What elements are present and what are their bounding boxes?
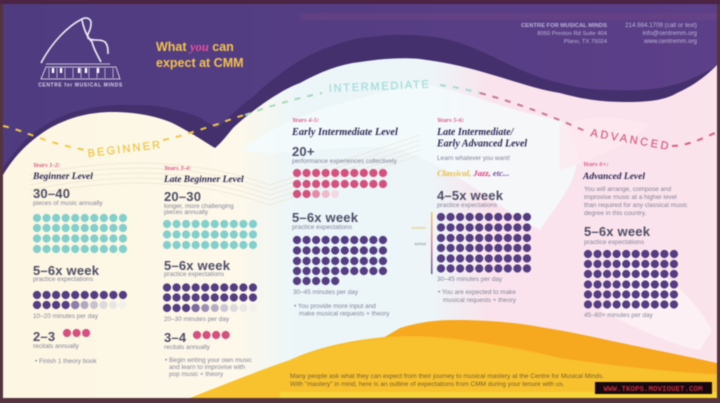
minutes caption: 20–30 minutes per day: [164, 316, 230, 323]
purple header background: [3, 4, 717, 184]
dot grid: practice: [588, 254, 675, 304]
stat: pieces: 30–40: [33, 186, 70, 201]
dots: recitals: [197, 331, 227, 339]
years: Years 4-5:: [292, 117, 319, 124]
title: What you can: [156, 40, 234, 54]
practice caption: practice expectations: [584, 239, 644, 246]
description: degree in this country.: [584, 210, 647, 217]
years: Years 6+:: [583, 161, 609, 168]
panel: late intermediate / early advanced level: [412, 117, 528, 304]
bullet: • Finish 1 theory book: [35, 358, 97, 365]
bullet: make musical requests + theory: [299, 310, 390, 318]
years: Years 3-4:: [164, 165, 191, 172]
level heading: Early Intermediate Level: [291, 127, 398, 138]
bottom border: [0, 398, 720, 403]
level heading: Late Intermediate/: [436, 127, 515, 138]
description: than required for any classical music: [584, 202, 688, 209]
years: Years 5-6:: [437, 117, 464, 124]
contact: address: [521, 23, 608, 45]
bullet: and learn to improvise with: [169, 364, 245, 371]
footer intro text: With "mastery" in mind, here is an outline of expectations from CMM during your tenure with us.: [290, 381, 565, 388]
level heading: Beginner Level: [32, 172, 93, 182]
stat: practice: 4–5x week: [437, 188, 504, 203]
dot grid: practice: [37, 295, 126, 309]
dot grid: pieces: [167, 224, 254, 245]
footer intro text: Many people ask what they can expect from their journey to musical mastery at the Centre for Musical Minds.: [290, 373, 604, 380]
dot grid: practice: [441, 217, 528, 268]
bullet: • You are expected to make: [438, 289, 516, 296]
stat: recitals: 2–3: [33, 329, 55, 344]
level heading: Advanced Level: [582, 172, 645, 182]
contact: phone, email, web: 214.984.1709 (call or text): [625, 22, 697, 29]
contact: phone, email, web: [625, 22, 698, 45]
bullet: • You provide more input and: [294, 303, 376, 310]
side bracket: summer and school: school: [414, 241, 426, 246]
dot grid: pieces: [37, 218, 124, 249]
genres: Classical, Jazz, etc...: [437, 168, 509, 178]
side bracket: summer and school: [412, 212, 432, 274]
watermark: [595, 382, 712, 394]
icon: grand piano outline: [41, 18, 108, 63]
dots: recitals: [67, 329, 87, 337]
stat caption: longer, more challenging: [164, 203, 234, 210]
side bracket: summer and school: summer: [412, 225, 427, 230]
minutes caption: 45–60+ minutes per day: [584, 312, 654, 319]
stat: practice: 5–6x week: [584, 224, 651, 239]
contact: address: CENTRE FOR MUSICAL MINDS: [521, 23, 607, 29]
panel: late beginner level: [163, 165, 257, 378]
contact: address: 8050 Preston Rd Suite 404: [537, 31, 608, 37]
stat: practice: 5–6x week: [33, 263, 100, 278]
dot grid: practice: [297, 240, 384, 281]
panel: early intermediate level: [291, 117, 398, 318]
practice caption: practice expectations: [437, 202, 497, 209]
stage label: beginner: BEGINNER: [87, 139, 161, 160]
title: expect at CMM: [156, 56, 244, 70]
dashed progress line: [3, 79, 717, 160]
recitals caption: recitals annually: [33, 343, 80, 350]
years: Years 1-2:: [33, 162, 60, 169]
contact: phone, email, web: www.centremm.org: [643, 38, 698, 45]
recitals caption: recitals annually: [164, 344, 211, 351]
icon: piano keyboard: [41, 64, 120, 79]
panel: advanced level: [582, 161, 688, 319]
stat: practice: 5–6x week: [292, 210, 359, 225]
level heading: Early Advanced Level: [436, 138, 527, 150]
bullet: • Begin writing your own music: [165, 357, 253, 364]
contact: address: Plano, TX 75024: [564, 39, 608, 45]
stage label: advanced: ADVANCED: [589, 127, 669, 153]
level heading: Late Beginner Level: [163, 175, 244, 185]
minutes caption: 30–45 minutes per day: [437, 276, 503, 283]
stat: recitals: 3–4: [164, 330, 187, 345]
stat caption: performance experiences collectively: [292, 158, 398, 165]
yellow bottom waves: [3, 320, 717, 398]
top border: [0, 0, 720, 4]
practice caption: practice expectations: [33, 276, 93, 283]
stat: pieces: 20–30: [164, 189, 201, 204]
stat caption: pieces annually: [164, 209, 209, 216]
stat caption: pieces of music annually: [33, 200, 103, 207]
practice caption: practice expectations: [292, 224, 352, 231]
stage label: intermediate: INTERMEDIATE: [329, 79, 429, 95]
stat: practice: 5–6x week: [164, 258, 231, 273]
dark wave band: [3, 35, 717, 200]
practice caption: practice expectations: [164, 271, 224, 278]
contact: phone, email, web: info@centremm.org: [643, 30, 698, 37]
bullet: pop music + theory: [169, 371, 224, 378]
bullet: musical requests + theory: [443, 297, 517, 304]
watercolor splashes and music staff: [30, 85, 712, 350]
logo wordmark: CENTRE for MUSICAL MINDS: [38, 82, 123, 88]
note: Learn whatever you want!: [437, 155, 510, 162]
description: improvise music at a higher level: [584, 194, 677, 201]
dot grid: performances: [297, 173, 384, 198]
description: You will arrange, compose and: [584, 186, 672, 193]
header tint streak: [300, 13, 717, 20]
stat: performances: 20+: [292, 144, 315, 159]
dot grid: practice: [167, 288, 257, 312]
panel: beginner level: [32, 162, 126, 365]
minutes caption: 30–45 minutes per day: [293, 289, 359, 296]
title: [156, 40, 244, 70]
logo: piano, Centre for Musical Minds: [38, 18, 123, 88]
watermark: WWW.TKOPS.MOVIOUET.COM: [603, 386, 703, 394]
footer intro text: [290, 373, 604, 388]
minutes caption: 10–20 minutes per day: [33, 313, 99, 320]
